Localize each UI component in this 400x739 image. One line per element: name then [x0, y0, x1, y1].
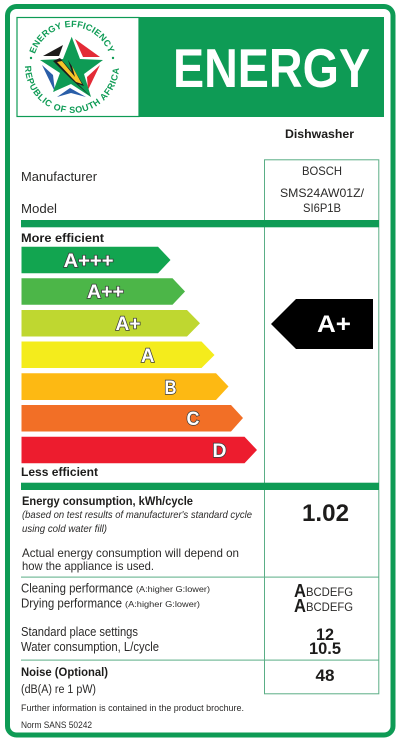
arrow D	[22, 437, 257, 463]
arrow A+++: A+++	[64, 251, 114, 272]
arrow C: C	[186, 409, 200, 430]
row divider	[21, 660, 379, 661]
logo dots	[30, 57, 114, 59]
arrow A++: A++	[87, 282, 124, 303]
energy consumption block: how the appliance is used.	[22, 559, 154, 573]
settings and water labels	[21, 625, 159, 654]
top divider bar	[21, 220, 379, 227]
settings and water values: 10.5	[309, 640, 341, 658]
arrow A	[22, 342, 214, 368]
value column frame	[264, 160, 379, 694]
efficiency scale	[22, 247, 257, 463]
rating arrow: A+	[317, 311, 351, 338]
settings and water values	[309, 626, 341, 658]
settings and water labels: Standard place settings	[21, 625, 138, 639]
energy value: 1.02	[302, 500, 349, 527]
performance grades: A	[294, 581, 306, 601]
arrow D: D	[212, 441, 226, 462]
settings and water labels: Water consumption, L/cycle	[21, 640, 159, 654]
model label: Model	[21, 202, 57, 216]
energy consumption block: Energy consumption, kWh/cycle	[22, 494, 193, 508]
performance labels: Drying performance	[21, 596, 122, 610]
performance grades: BCDEFG	[306, 587, 353, 599]
row divider	[21, 577, 379, 578]
energy heading: ENERGY	[173, 37, 370, 99]
manufacturer value: BOSCH	[302, 164, 342, 178]
arrow B: B	[164, 378, 176, 399]
arrow A++	[22, 278, 185, 305]
arrow A+++	[22, 247, 170, 273]
logo ring text top: ENERGY EFFICIENCY	[29, 20, 115, 54]
model value	[280, 186, 365, 215]
performance labels: Cleaning performance	[21, 582, 133, 596]
noise labels: Noise (Optional)	[21, 665, 108, 679]
performance labels: (A:higher G:lower)	[136, 584, 210, 594]
noise labels: (dB(A) re 1 pW)	[21, 684, 96, 696]
logo star	[40, 37, 103, 97]
appliance type: Dishwasher	[285, 127, 354, 141]
less efficient heading: Less efficient	[21, 465, 98, 479]
more efficient heading: More efficient	[21, 231, 104, 245]
arrow C	[22, 405, 243, 432]
arrow B	[22, 373, 228, 400]
performance labels: (A:higher G:lower)	[125, 599, 200, 609]
performance grades	[294, 581, 353, 616]
energy consumption block	[22, 494, 252, 573]
rating arrow	[271, 299, 373, 349]
performance grades: BCDEFG	[306, 602, 353, 614]
arrow A: A	[141, 346, 155, 367]
header	[16, 16, 384, 118]
noise labels	[21, 665, 108, 696]
model value: SI6P1B	[303, 201, 341, 215]
noise value: 48	[316, 667, 334, 685]
energy consumption block: Actual energy consumption will depend on	[22, 546, 239, 560]
arrow A+	[22, 310, 200, 336]
energy consumption block: using cold water fill)	[22, 523, 107, 535]
performance labels	[21, 582, 210, 610]
energy banner	[139, 17, 384, 117]
manufacturer label: Manufacturer	[21, 170, 97, 184]
energy consumption block: (based on test results of manufacturer's standard cycle	[22, 509, 252, 521]
logo ring text bottom: REPUBLIC OF SOUTH AFRICA	[24, 66, 119, 113]
arrow A+: A+	[116, 314, 140, 335]
performance grades: A	[294, 596, 306, 616]
norm note: Norm SANS 50242	[21, 720, 92, 730]
middle divider bar	[21, 483, 379, 490]
settings and water values: 12	[316, 626, 334, 644]
brochure note: Further information is contained in the product brochure.	[21, 703, 244, 713]
model value: SMS24AW01Z/	[280, 186, 365, 200]
logo panel	[16, 16, 140, 118]
